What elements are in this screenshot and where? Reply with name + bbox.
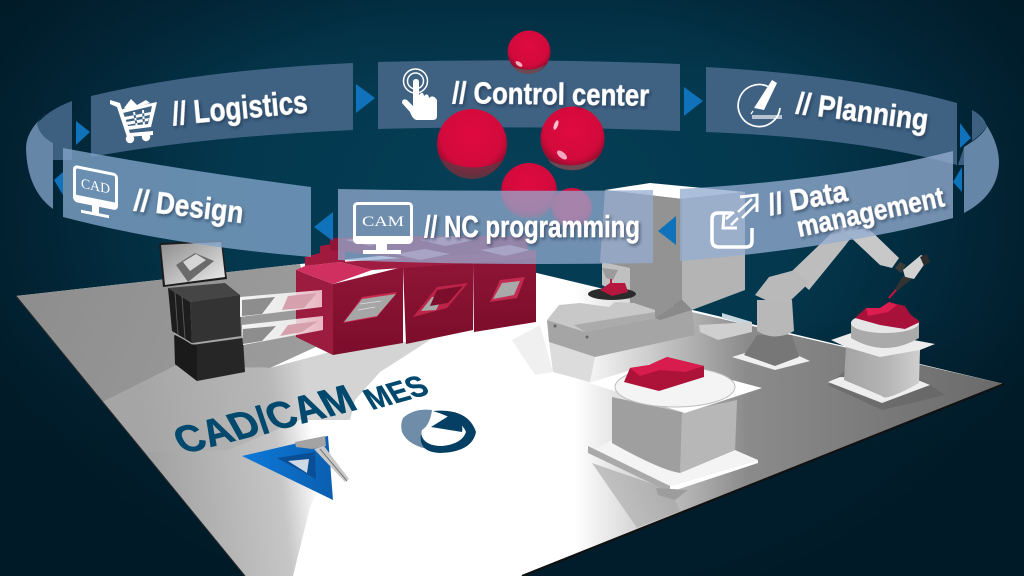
front top plate: [589, 361, 762, 413]
label: NC programming: // NC programming: [424, 209, 640, 244]
robot base plate: [732, 353, 810, 370]
robot forearm: [845, 228, 899, 268]
label: data: // Data: [765, 175, 850, 222]
arrow: ring left to logistics: [76, 121, 90, 145]
floor text: CAD/CAM MES: MES: [358, 370, 435, 416]
arrow: control center to planning: [684, 87, 703, 116]
red cubes: [296, 236, 536, 355]
sphere left: [437, 109, 507, 179]
workstation rear right: [828, 302, 935, 403]
icon: shopping cart: [110, 99, 157, 143]
icon: CAM monitor: [354, 204, 412, 254]
front red part: [624, 357, 704, 391]
front body: [612, 397, 737, 473]
icon: pen in circle: [738, 80, 782, 127]
robot pedestal: [744, 335, 799, 366]
label: logistics: // Logistics: [170, 84, 309, 132]
icon: CAD monitor: [74, 166, 116, 220]
robot upper arm: [790, 226, 860, 290]
spheres: [437, 30, 604, 228]
cube 3: [473, 258, 536, 332]
rear base plate: [828, 377, 930, 403]
front turntable: [615, 367, 735, 407]
arrow: ring right to data management: [953, 167, 962, 192]
sphere top: [508, 30, 550, 74]
label: design: // Design: [132, 182, 246, 230]
back part of ring, left: [26, 101, 72, 209]
workstation front: [588, 357, 762, 500]
logo: blue triangle with milling tool: [242, 436, 349, 500]
floor plate: [16, 250, 1004, 576]
rail lines: [699, 313, 752, 340]
arrow: data management to NC programming: [658, 216, 676, 245]
machine base: [547, 300, 695, 357]
back part of ring, right: [958, 110, 999, 213]
cube stepped tops: [296, 236, 536, 284]
CNC machine: [547, 183, 745, 357]
label: planning: // Planning: [794, 85, 931, 137]
arrow: logistics to control center: [356, 84, 375, 113]
arrow: NC programming to design: [314, 212, 333, 241]
panel: planning band: [706, 67, 957, 165]
rear top plate: [831, 330, 935, 357]
machine column: [600, 183, 745, 318]
front base plate: [588, 440, 758, 500]
robot shoulder: [755, 270, 809, 302]
arrow: planning to ring right: [960, 123, 971, 148]
cube 2: [403, 262, 473, 344]
label: control center: // Control center: [452, 75, 649, 113]
black server rack: [168, 283, 245, 381]
rear cylinder: [851, 322, 919, 348]
label: management: management: [794, 181, 947, 244]
logo: swirl: [401, 410, 476, 453]
robot arm: [732, 226, 930, 370]
glass transfer bars: [240, 290, 323, 345]
floor text: CAD/CAM MES: CAD/CAM: [165, 377, 364, 462]
robot column: [757, 300, 794, 336]
sphere small: [552, 188, 592, 228]
panel: NC programming band: [338, 189, 653, 264]
spindle and red part: [588, 268, 636, 300]
robot tool: [889, 254, 930, 298]
rear body: [844, 347, 920, 397]
icon: CAD monitor: CAD: [81, 176, 110, 197]
sphere centre: [501, 163, 557, 219]
panel: control center band: [378, 60, 680, 131]
cube 1: [296, 267, 403, 355]
monitor with part model: [159, 240, 227, 287]
rear red part: [855, 302, 920, 329]
icon: touch hand: [402, 69, 437, 120]
icon: CAM monitor: CAM: [362, 214, 404, 230]
panel: design band: [63, 148, 311, 257]
panel: data management band: [680, 151, 953, 261]
arrow: design to ring left: [54, 172, 63, 195]
panel: logistics band: [91, 63, 353, 157]
floor text: CAD/CAM MES: [165, 370, 435, 462]
sphere right: [540, 106, 604, 170]
icon: data share: [712, 195, 757, 247]
